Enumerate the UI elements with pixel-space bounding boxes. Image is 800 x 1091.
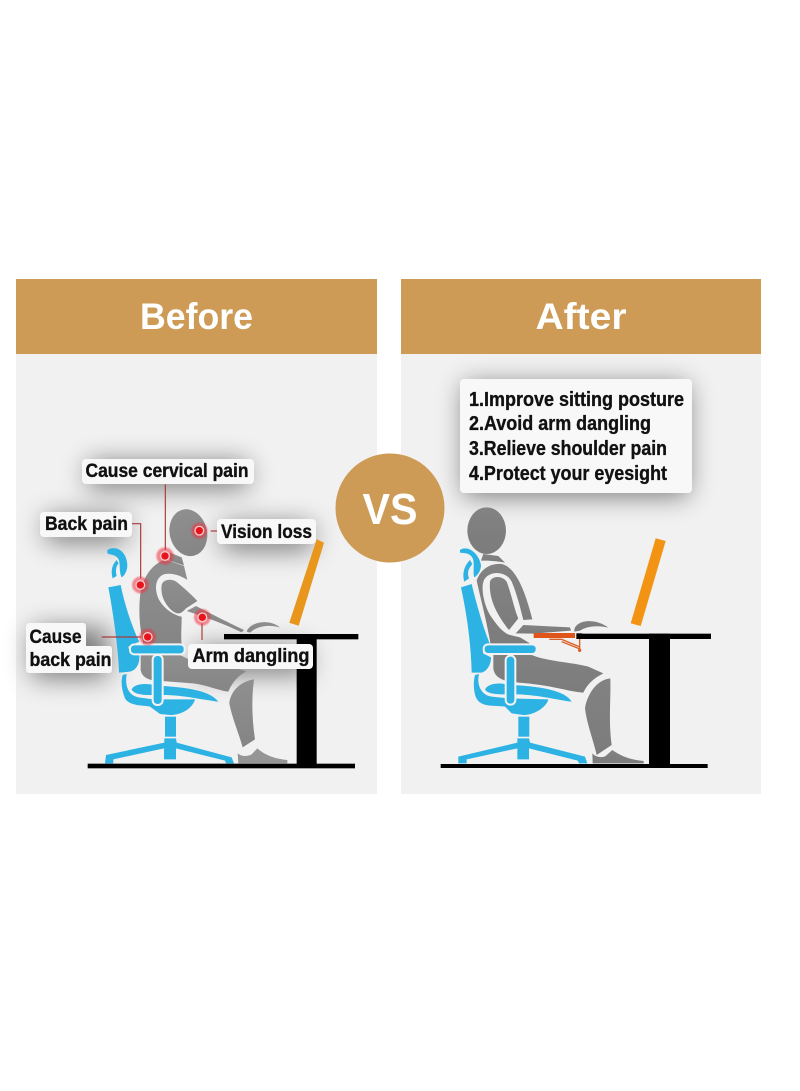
- person lower body: [141, 653, 287, 763]
- callout: benefits list: [460, 379, 692, 493]
- callout: benefits list: 1.Improve sitting posture: [469, 389, 684, 411]
- laptop screen: [289, 539, 324, 626]
- panel: before: [16, 279, 377, 794]
- illustration: before, slouched person at desk: [88, 484, 358, 768]
- header: before: [16, 279, 377, 354]
- person upper body: [467, 507, 608, 652]
- label: arm dangling: Arm dangling: [192, 646, 310, 667]
- desk and floor: [88, 634, 358, 768]
- laptop screen: [631, 538, 666, 626]
- office chair: [458, 548, 587, 763]
- label: cause back pain: [26, 623, 112, 673]
- label: back pain: Back pain: [45, 514, 128, 535]
- person upper body: [139, 505, 280, 644]
- illustration: after, upright person with arm rest: [441, 507, 711, 768]
- person lower body: [493, 646, 644, 763]
- pain points: [132, 523, 211, 645]
- VS badge: [336, 454, 444, 562]
- label: cause back pain: Cause: [30, 627, 82, 648]
- label: cause back pain: back pain: [30, 650, 112, 671]
- callout: benefits list: 4.Protect your eyesight: [469, 463, 667, 485]
- adjustable arm rest: [534, 633, 582, 652]
- label: vision loss: Vision loss: [221, 522, 312, 543]
- header: before: Before: [140, 296, 253, 337]
- header: after: [401, 279, 761, 354]
- callout: benefits list: 3.Relieve shoulder pain: [469, 438, 667, 460]
- office chair: [105, 548, 234, 763]
- leader lines: [102, 484, 218, 640]
- panel: after: [401, 279, 761, 794]
- VS badge: VS: [362, 485, 418, 534]
- callout: benefits list: 2.Avoid arm dangling: [469, 413, 651, 435]
- desk and floor: [441, 634, 711, 768]
- soft shadows behind labels: [32, 384, 688, 678]
- header: after: After: [536, 296, 626, 337]
- label: cause cervical pain: Cause cervical pain: [86, 461, 248, 482]
